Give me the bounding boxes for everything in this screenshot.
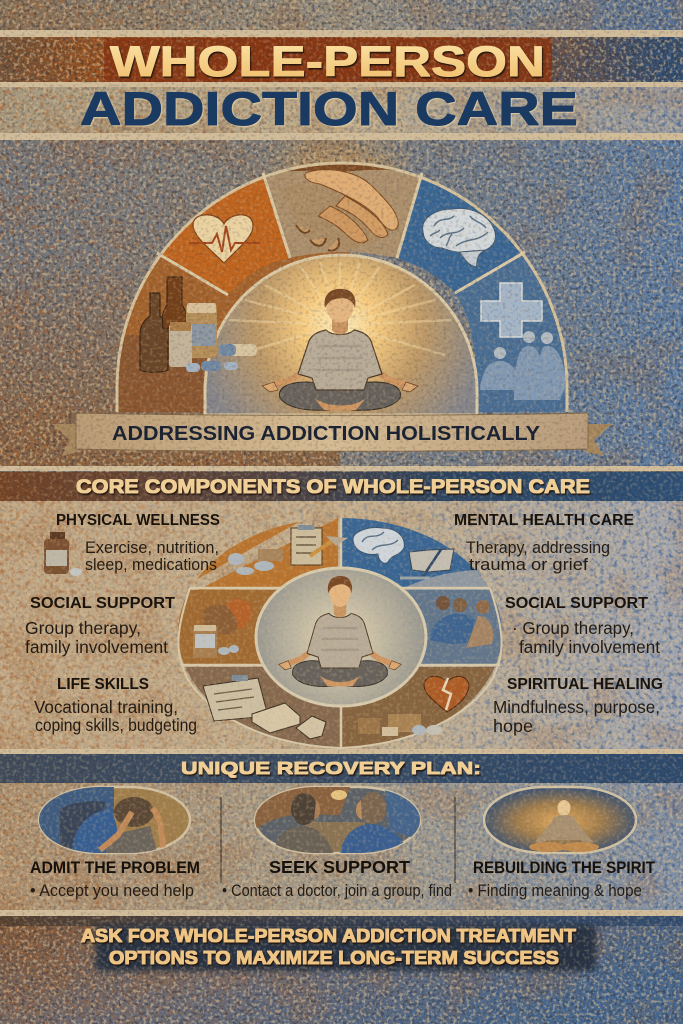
text block: social support right	[505, 595, 660, 657]
text block: life skills: Vocational training,	[34, 697, 178, 717]
footer dark text plate	[96, 925, 596, 971]
text block: social support left: Group therapy,	[25, 618, 141, 638]
inner glowing arch	[205, 255, 477, 415]
wheel segment: life skills	[178, 667, 342, 751]
footer call to action: ASK FOR WHOLE-PERSON ADDICTION TREATMENT	[81, 926, 576, 946]
step 3: rebuilding the spirit	[468, 859, 655, 900]
banner: addressing addiction holistically	[52, 413, 612, 456]
footer call to action: OPTIONS TO MAXIMIZE LONG-TERM SUCCESS	[109, 948, 559, 968]
wheel segment: physical	[196, 518, 338, 590]
text block: social support right: family involvement	[519, 637, 660, 657]
wheel segment: spiritual	[342, 667, 502, 751]
wheel center circle	[256, 568, 426, 706]
text block: life skills: LIFE SKILLS	[57, 676, 149, 693]
banner text: ADDRESSING ADDICTION HOLISTICALLY	[112, 423, 541, 445]
icon: handshake	[280, 170, 398, 250]
text block: social support left: family involvement	[25, 637, 168, 657]
icon: bottles and pills	[140, 277, 257, 372]
segment: brain	[397, 172, 525, 293]
section: core header band	[0, 472, 683, 501]
text block: mental health care: MENTAL HEALTH CARE	[454, 512, 634, 529]
title band: rust	[0, 36, 683, 84]
step 1: admit the problem	[30, 859, 200, 900]
title: whole-person: WHOLE-PERSON	[110, 38, 545, 86]
step 1: admit the problem: ADMIT THE PROBLEM	[30, 859, 200, 877]
text block: life skills: coping skills, budgeting	[35, 715, 197, 735]
wheel segment: social left	[178, 590, 276, 664]
icon: papers and books	[203, 675, 326, 739]
step 1: admit the problem: • Accept you need help	[30, 881, 194, 900]
outer arc outline	[117, 163, 567, 412]
plan dividers	[221, 797, 455, 883]
background: stone top strip	[0, 0, 683, 36]
heading: core components: CORE COMPONENTS OF WHOLE-PERSON CARE	[76, 476, 590, 498]
wheel meditating person	[279, 576, 401, 686]
text block: mental health care: trauma or grief	[469, 555, 588, 574]
oval illustration: glowing silhouette	[484, 787, 636, 853]
text block: mental health care	[454, 512, 634, 574]
icon: medical cross	[481, 283, 542, 337]
icon: support group figures, right	[430, 596, 493, 648]
oval illustration: person head in hands	[39, 787, 190, 855]
section: footer background	[0, 916, 683, 1024]
step 2: seek support: • Contact a doctor, join a group, find	[222, 881, 452, 900]
step 3: rebuilding the spirit: • Finding meaning & hope	[468, 881, 642, 900]
segment: substances background	[125, 252, 350, 335]
text block: physical wellness: sleep, medications	[85, 555, 217, 574]
text block: spiritual healing: hope	[493, 716, 533, 736]
icon: medicine bottle, physical wellness	[44, 532, 82, 576]
footer dark top band	[0, 916, 683, 926]
section: core panel background	[0, 501, 683, 750]
segment: heart	[163, 179, 288, 294]
text block: physical wellness	[56, 512, 220, 574]
icon: heart with pulse	[189, 215, 260, 263]
title band: stone	[0, 84, 683, 136]
heading: unique recovery plan: UNIQUE RECOVERY PLAN:	[181, 758, 481, 778]
text block: life skills	[34, 676, 197, 735]
step 3: rebuilding the spirit: REBUILDING THE SPIRIT	[473, 859, 655, 877]
icon: small brain and book	[353, 528, 454, 578]
text block: spiritual healing: SPIRITUAL HEALING	[507, 676, 663, 693]
icon: pill bottle and heart, left	[193, 599, 252, 658]
title dark rust plate	[104, 38, 552, 82]
title: addiction care: ADDICTION CARE	[80, 82, 578, 135]
oval illustration: two people talking	[255, 787, 420, 855]
segment: cross and people	[455, 252, 570, 415]
footer call to action	[81, 926, 576, 968]
icon: broken heart and boxes	[358, 676, 469, 736]
text block: physical wellness: PHYSICAL WELLNESS	[56, 512, 220, 529]
hero meditating person	[262, 289, 418, 410]
text block: mental health care: Therapy, addressing	[466, 538, 610, 557]
hero semicircle illustration	[110, 160, 570, 415]
section: plan header band	[0, 754, 683, 783]
segment: handshake	[266, 170, 419, 258]
step 2: seek support: SEEK SUPPORT	[269, 857, 410, 877]
icon: brain	[423, 208, 495, 267]
text block: spiritual healing: Mindfulness, purpose,	[493, 697, 660, 717]
step 2: seek support	[222, 857, 452, 900]
section: plan panel background	[0, 783, 683, 911]
text block: social support right: SOCIAL SUPPORT	[505, 595, 648, 612]
text block: social support left: SOCIAL SUPPORT	[30, 595, 175, 612]
hero background	[0, 136, 683, 468]
light rays	[228, 262, 452, 355]
segment dividers	[157, 173, 525, 295]
component wheel	[178, 500, 510, 751]
text block: social support right: · Group therapy,	[512, 618, 634, 638]
icon: support group	[480, 331, 566, 400]
text block: social support left	[25, 595, 175, 657]
wheel segment: social right	[406, 590, 502, 664]
text block: physical wellness: Exercise, nutrition,	[85, 538, 219, 557]
icon: clipboard and pills	[228, 525, 348, 575]
wheel segment: mental	[342, 518, 502, 588]
text block: spiritual healing	[493, 676, 663, 736]
